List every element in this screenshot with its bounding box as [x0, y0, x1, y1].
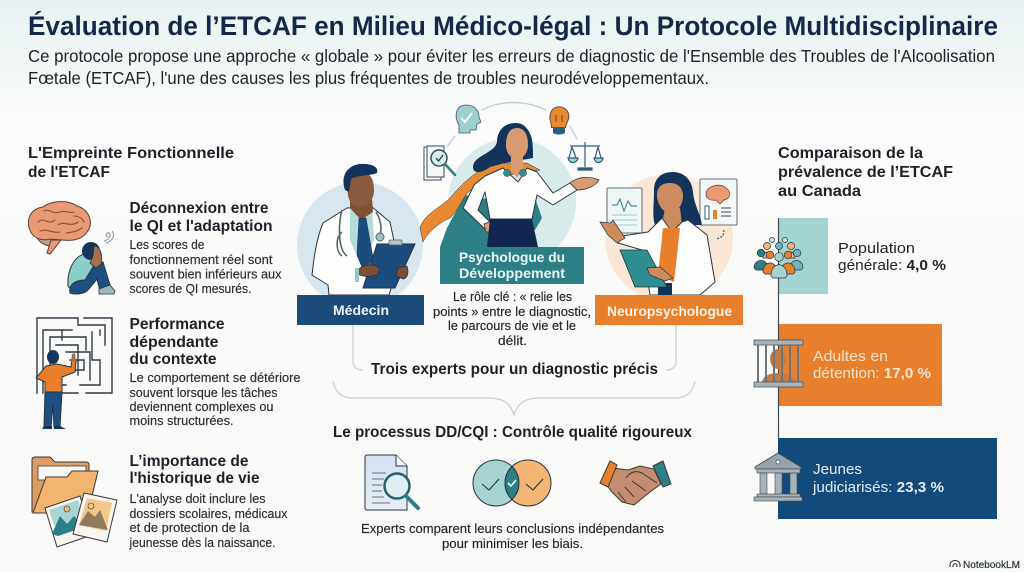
text: performance dépendante: deviennent complexes ou — [130, 400, 274, 414]
connector: experts bracket — [353, 325, 676, 370]
heading: comparaison: prévalence de l’ETCAF — [778, 164, 953, 181]
text: rôle clé: Le rôle clé : « relie les — [453, 289, 572, 304]
label: adultes: détention: 17,0 % — [813, 365, 931, 382]
text: rôle clé: points » entre le diagnostic, — [433, 304, 591, 319]
text: historique de vie: dossiers scolaires, médicaux — [130, 507, 288, 521]
text: historique de vie: l'historique de vie — [130, 470, 260, 487]
text: déconnexion QI: Les scores de — [130, 238, 205, 252]
text: performance dépendante: Le comportement se détériore — [130, 371, 301, 385]
heading: empreinte: L'Empreinte Fonctionnelle — [28, 145, 234, 162]
heading: comparaison — [778, 145, 953, 200]
icon: courthouse — [754, 453, 802, 501]
axis — [778, 218, 780, 438]
label: jeunes: judiciarisés: 23,3 % — [812, 479, 944, 496]
panel: prévalence au Canada — [754, 145, 997, 519]
text: déconnexion QI: le QI et l'adaptation — [130, 218, 272, 235]
intro text: Ce protocole propose une approche « globale » pour éviter les erreurs de diagnostic de l'Ensemble des Troubles de l'Alcoolisation — [28, 46, 995, 66]
heading: comparaison: Comparaison de la — [778, 145, 923, 162]
icon: scales of justice — [568, 142, 603, 170]
label: population: générale: 4,0 % — [838, 257, 946, 274]
icon: handshake — [600, 461, 671, 505]
icon: prison bars — [754, 340, 803, 387]
label: médecin — [297, 295, 424, 325]
icon: head with check — [456, 105, 481, 133]
text: rôle clé — [433, 289, 591, 348]
label: psychologue du développement: Psychologue du — [459, 249, 565, 265]
icon: document with magnifier — [424, 146, 455, 180]
heading: trois experts: Trois experts pour un diagnostic précis — [371, 361, 658, 378]
label: population — [838, 240, 946, 274]
text: rôle clé: délit. — [498, 333, 527, 348]
text: historique de vie: L’importance de — [130, 453, 249, 470]
icon: document review — [365, 455, 418, 510]
heading: empreinte: de l'ETCAF — [28, 164, 110, 181]
text: performance dépendante: moins structurées. — [130, 414, 234, 428]
label: neuropsychologue — [595, 295, 743, 325]
text: historique de vie — [129, 453, 288, 550]
text: performance dépendante — [130, 316, 301, 428]
text: comparaison — [361, 521, 665, 551]
text: historique de vie: L'analyse doit inclure les — [130, 492, 266, 506]
illustration: médecin — [297, 164, 423, 308]
label: adultes: Adultes en — [813, 348, 888, 365]
text: rôle clé: le parcours de vie et le — [448, 318, 576, 333]
icon: brain panel — [700, 179, 737, 225]
text: performance dépendante: Performance — [130, 316, 225, 333]
label: jeunes: Jeunes — [813, 461, 862, 478]
bar: population générale — [779, 218, 828, 294]
title: Évaluation de l’ETCAF en Milieu Médico-légal : Un Protocole Multidisciplinaire — [28, 10, 998, 41]
text: historique de vie: et de protection de la — [130, 521, 250, 535]
text: déconnexion QI: fonctionnement réel sont — [130, 253, 273, 267]
icon: venn checks — [473, 460, 551, 506]
text: déconnexion QI: scores de QI mesurés. — [130, 282, 252, 296]
panel: processus DD/CQI — [333, 424, 692, 551]
panel: empreinte fonctionnelle — [28, 145, 301, 550]
icon: chart panel — [607, 188, 642, 233]
heading: processus: Le processus DD/CQI : Contrôle qualité rigoureux — [333, 424, 692, 441]
text: performance dépendante: dépendante — [130, 334, 219, 351]
watermark: NotebookLM: NotebookLM — [963, 559, 1020, 571]
label: médecin: Médecin — [333, 302, 389, 318]
label: jeunes — [812, 461, 944, 496]
label: psychologue du développement: Développement — [459, 265, 565, 281]
text: déconnexion QI — [130, 200, 282, 296]
illustration: psychologue — [420, 102, 603, 266]
text: performance dépendante: du contexte — [130, 351, 217, 368]
icon: brain and distressed person — [28, 202, 115, 294]
intro text: Fœtale (ETCAF), l'une des causes les plus fréquentes de troubles neurodéveloppementaux. — [28, 68, 709, 88]
heading: comparaison: au Canada — [778, 183, 861, 200]
brace connector — [333, 381, 695, 415]
text: performance dépendante: souvent lorsque les tâches — [130, 386, 278, 400]
intro text — [28, 46, 995, 88]
label: population: Population — [838, 240, 915, 257]
icon: light bulb — [550, 107, 569, 134]
heading: empreinte — [28, 145, 234, 181]
label: adultes — [813, 348, 931, 382]
bar: jeunes judiciarisés — [778, 438, 997, 519]
icon: folder and photos — [32, 457, 117, 547]
text: historique de vie: jeunesse dès la naissance. — [129, 536, 276, 550]
icon: crowd — [754, 238, 803, 278]
icon: maze and person — [36, 318, 112, 429]
text: déconnexion QI: Déconnexion entre — [130, 200, 269, 217]
bar: adultes en détention — [779, 324, 942, 406]
text: comparaison: pour minimiser les biais. — [442, 536, 583, 551]
text: déconnexion QI: souvent bien inférieurs aux — [130, 268, 282, 282]
label: psychologue du développement — [440, 247, 584, 284]
text: comparaison: Experts comparent leurs conclusions indépendantes — [361, 521, 665, 536]
panel: trois experts — [297, 102, 743, 415]
illustration: neuropsychologue — [600, 172, 737, 302]
label: neuropsychologue: Neuropsychologue — [607, 303, 732, 319]
